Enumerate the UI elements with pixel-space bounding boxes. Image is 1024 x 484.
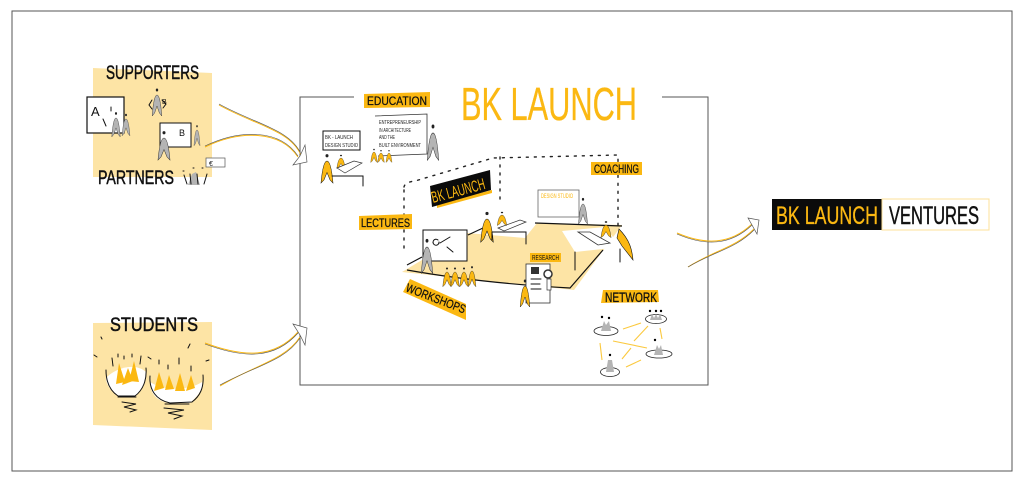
label: coaching: COACHING [594, 162, 639, 176]
arrow: supporters to main [205, 104, 307, 165]
network node: bottom [600, 354, 620, 376]
network node: top left [594, 316, 618, 336]
scene: floor edges [407, 223, 622, 288]
network connections [600, 323, 662, 367]
label: workshops: WORKSHOPS [404, 281, 468, 316]
board: design studio coaching: DESIGN STUDIO [541, 194, 573, 200]
arrow: students to main [205, 324, 307, 386]
diagram: network [594, 310, 672, 376]
figure: researcher [520, 280, 530, 307]
banner text: bk launch: BK LAUNCH [776, 202, 878, 230]
banner text: ventures: VENTURES [889, 202, 979, 230]
label: network: NETWORK [605, 290, 657, 305]
figure: lecturer [421, 239, 433, 273]
icon: supporter B board: B [179, 128, 185, 138]
heading: students: STUDENTS [110, 315, 198, 336]
scene: studio floor [402, 223, 622, 290]
desk and figures: coaching [562, 221, 633, 270]
label: lectures [359, 214, 412, 230]
board: entrepreneurship: BUILT ENVIRONMENT [379, 143, 421, 149]
main panel outline [300, 97, 708, 385]
board: design studio: DESIGN STUDIO [325, 143, 359, 149]
board: design studio: BK - LAUNCH [325, 135, 353, 141]
decorative rays [94, 337, 209, 361]
desk and figures: centre [481, 212, 526, 244]
heading: partners: PARTNERS [98, 168, 174, 189]
board: design studio coaching [538, 190, 579, 217]
panel: students [93, 315, 212, 430]
panel: supporters and partners [87, 63, 225, 189]
board: entrepreneurship: IN ARCHITECTURE [379, 128, 411, 134]
network node: right [646, 339, 672, 358]
icon: right light bulb [150, 358, 203, 419]
label: bk launch sign [430, 170, 492, 208]
figure: educator [427, 125, 439, 160]
figures and desk: design studio [321, 154, 363, 186]
icon: research document and magnifier [526, 264, 552, 303]
board: lecture [423, 230, 467, 261]
label: research [530, 253, 561, 262]
label: lectures: LECTURES [361, 216, 410, 230]
board: entrepreneurship: AND THE [379, 135, 395, 141]
network node: top right [646, 310, 666, 324]
scene: dotted walls [404, 155, 618, 252]
banner: bk launch ventures [772, 199, 989, 230]
icon: supporter figure: B [162, 99, 167, 106]
figures: education audience [371, 149, 392, 162]
icon: supporter A board: A [91, 104, 100, 119]
icon: left light bulb [106, 354, 146, 412]
board: design studio [323, 131, 360, 150]
icon: euro note: € [209, 161, 213, 168]
board: entrepreneurship [375, 114, 427, 156]
figures: workshop group [443, 266, 476, 287]
label: bk launch sign: BK LAUNCH [430, 176, 487, 207]
board: entrepreneurship: ENTREPRENEURSHIP [379, 120, 421, 126]
icon: partners group [183, 168, 207, 185]
title: BK LAUNCH [461, 78, 637, 130]
arrow: main to ventures [677, 218, 759, 267]
label: research: RESEARCH [532, 253, 559, 262]
figure: coach [578, 198, 588, 224]
label: education: EDUCATION [367, 94, 427, 108]
heading: supporters: SUPPORTERS [106, 63, 199, 84]
